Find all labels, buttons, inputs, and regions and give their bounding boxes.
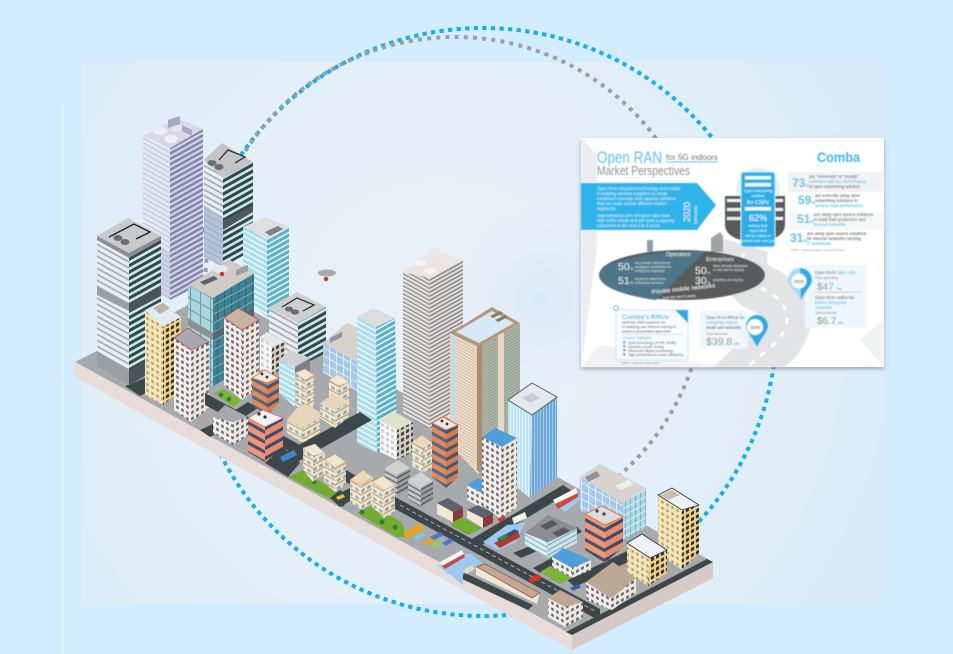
orange building (252, 370, 279, 415)
footnotes (622, 248, 845, 365)
tall yellow building (658, 488, 699, 570)
server graphic: for CSPs (747, 200, 769, 206)
2026 figure panel: Open RAN radio units (815, 270, 856, 275)
2026 figure panel: $47 (817, 282, 834, 293)
2026 figure panel: $6.7 (817, 316, 837, 327)
corner warehouse (548, 590, 583, 627)
stat list: to build their production and (814, 217, 866, 222)
stat list: 59% (798, 193, 815, 207)
stat list: confident with the performance (809, 179, 867, 184)
grass strip one (288, 470, 338, 500)
operators and enterprises oval: enterprise services (635, 281, 664, 285)
cream domed building (174, 328, 209, 422)
Comba's RRUs box: High performance power efficiency (628, 353, 683, 357)
small houses (437, 498, 493, 528)
blue arrow panel: segments. (597, 206, 616, 211)
card contents (581, 138, 884, 385)
stat list: are currently using open (815, 193, 861, 198)
map pin 2030: 2030 (750, 325, 761, 330)
twin warehouse (586, 562, 636, 610)
operators and enterprises oval: privately and deploy (713, 278, 743, 282)
2030 RRU figure panel: enterprise indoor (706, 320, 738, 325)
operators and enterprises oval: over the next 5 years (663, 294, 696, 300)
grey striped mid tower (269, 292, 326, 367)
grey block (385, 460, 410, 496)
stat list: internal networks (814, 222, 846, 227)
grass by houses (450, 517, 482, 535)
server graphic: believe that (749, 224, 767, 228)
2026 figure panel (805, 265, 867, 328)
thin vertical line (62, 105, 63, 654)
road network (200, 393, 660, 621)
blue arrow panel: forecasts (693, 205, 698, 224)
document card: Open RAN for 5G indoors (581, 138, 884, 385)
road stub with car (330, 490, 350, 507)
front cream block two (324, 454, 346, 492)
tiered building left (287, 369, 320, 443)
grass strip two with trees (357, 505, 405, 537)
Comba's RRUs box: Comba's RRUs (622, 314, 669, 321)
stat list: 51% (797, 212, 814, 226)
Comba's RRUs box: optimize RAN systems for (622, 320, 666, 324)
yellow building (145, 302, 181, 405)
operators and enterprises oval: are private networks an (635, 261, 670, 265)
card background (581, 138, 884, 367)
2030 RRU figure panel: small cell networks (706, 325, 741, 330)
2026 figure panel: networks (815, 305, 832, 310)
tiered building right (320, 374, 350, 428)
soft blue glow (450, 210, 630, 390)
operators and enterprises oval: expect to divert from (635, 277, 666, 281)
2026 figure panel: indoor enterprise (815, 300, 847, 305)
stat list (788, 172, 884, 246)
server graphic: will be critical or (745, 234, 771, 238)
server graphic: solution (751, 194, 765, 198)
server graphic: Open networking (744, 189, 772, 193)
blue glass low tower (323, 323, 358, 392)
operators and enterprises oval: 30% (695, 275, 711, 287)
cream building with blue dome (467, 478, 492, 508)
stat list: are "extremely" or "mostly" (809, 174, 859, 179)
stat list: IT workloads (807, 241, 831, 246)
cream block front left (350, 470, 373, 510)
orange tall building (432, 417, 458, 488)
grey block front (408, 472, 433, 507)
drone (318, 270, 336, 281)
white small tower (380, 412, 413, 460)
2030 RRU figure panel (700, 311, 748, 349)
map pin 2026: 2026 (794, 279, 805, 284)
Comba's RRUs box: Advanced digital processing (628, 349, 673, 353)
blue arrow panel: 2020 (682, 202, 692, 222)
cream tiered tower (412, 435, 432, 473)
grey-topped glass block (525, 515, 577, 558)
stat list: are using open source solutions (807, 231, 866, 236)
front cream block one (303, 444, 325, 482)
stat list: of open networking solution (809, 184, 861, 189)
blue glass tower (508, 383, 557, 498)
left big grey tower (97, 218, 161, 385)
map pin 2026 (788, 268, 812, 301)
inner background panel (82, 62, 884, 604)
road graphic (581, 138, 884, 385)
cyan slim tower (357, 308, 397, 453)
front harbour with ship (438, 550, 482, 585)
2030 RRU figure panel: Open RAN RRUs for (706, 315, 745, 320)
blue arrow panel: that can scale across different market (597, 201, 667, 206)
grey dotted circle (205, 37, 705, 537)
logo: Comba: Comba (817, 149, 860, 165)
low cream domed building (213, 405, 248, 445)
tall cream tower with blue dome (482, 428, 517, 518)
2026 figure panel: Mn (837, 287, 842, 291)
footnotes: MIMO = Massive Radio MIMO (622, 361, 660, 365)
Comba's RRUs box: Product highlights (623, 336, 652, 340)
stat list: are using open source solutions (814, 212, 873, 217)
vehicles on road (497, 516, 581, 591)
2026 figure panel: Total revenue (815, 311, 837, 315)
blue arrow panel: Open RAN virtualized technology and enable (597, 186, 681, 191)
blue arrow panel: Approximately 20% of indoor sites have (597, 213, 671, 218)
server graphic (725, 168, 785, 247)
operators and enterprises oval (599, 232, 765, 300)
title (597, 149, 718, 178)
stat list: achieve high performance (815, 203, 864, 208)
operators and enterprises oval: have already deployed (713, 264, 747, 268)
Comba's RRUs box: in-building use without having to (622, 325, 676, 329)
server graphic: 62% (749, 213, 767, 223)
server graphic: important over next years (738, 239, 778, 243)
2030 RRU figure panel: Mn (734, 342, 739, 346)
pink orange building (585, 506, 623, 563)
long market hall (476, 564, 540, 604)
operators and enterprises oval: Private mobile networks (652, 283, 716, 296)
title: Market Perspectives (597, 164, 690, 178)
grass by hall (540, 566, 572, 584)
isometric city (75, 116, 713, 650)
cream domed tower (224, 308, 259, 400)
tower behind with black roof frame (204, 143, 253, 267)
tall grey striped tower (403, 246, 463, 430)
stat list: 73% (792, 176, 809, 190)
title: Open RAN (597, 149, 662, 167)
server graphic: Open RAN (749, 229, 767, 233)
operators and enterprises oval: Operators (666, 252, 691, 258)
operators and enterprises oval: or will start to deploy (713, 268, 744, 272)
pink brick building (248, 410, 283, 462)
operators and enterprises oval: 50% (695, 265, 711, 277)
short yellow building (627, 534, 667, 586)
map pin 2030 (746, 315, 768, 347)
2026 figure panel: Mn (838, 321, 843, 325)
blue arrow panel: expansion in the next 2 to 3 years. (597, 223, 661, 228)
blue arrow panel (581, 183, 716, 230)
2030 RRU figure panel: Total revenue (706, 332, 728, 336)
upper harbour with ship (553, 488, 580, 512)
stat list: 31% (790, 231, 807, 245)
blue arrow panel: combined coverage and capacity solutions (597, 196, 676, 201)
operators and enterprises oval: 51% (618, 275, 634, 287)
Comba's RRUs box: adopt a proprietary approach (622, 330, 671, 334)
tall lavender tower (143, 116, 203, 300)
small white building (260, 332, 285, 377)
operators and enterprises oval: 50% (618, 261, 634, 273)
grass and parking with truck and cars (400, 520, 455, 556)
footnotes: CSPs = Communications Service Providers (791, 248, 845, 252)
cyan tower (243, 217, 289, 317)
blue dotted circle (189, 28, 777, 616)
operators and enterprises oval: Enterprises (706, 257, 734, 263)
title: for 5G indoors (666, 152, 718, 162)
water harbour with ship (483, 512, 527, 550)
stat list: networking solutions to (815, 198, 858, 203)
grass patch with trees (213, 389, 242, 407)
Comba's RRUs box (614, 306, 688, 360)
operators and enterprises oval: enterprise business (635, 269, 665, 273)
blue domed hall (552, 548, 591, 578)
peach tower with blue roof (450, 307, 520, 475)
stat list: for internal networks carrying (807, 236, 861, 241)
2030 RRU figure panel: $39.8 (706, 336, 732, 348)
cyan small block (279, 350, 310, 407)
2026 figure panel: Open RAN radios for (815, 295, 854, 300)
platform (75, 291, 713, 650)
Comba's RRUs box: Dynamic power tuning (628, 345, 664, 349)
blue arrow panel: in-building wireless suppliers to create (597, 191, 668, 196)
operators and enterprises oval: untapped contribution to (635, 265, 671, 269)
road block with cars (265, 447, 300, 477)
large glass office (580, 464, 646, 540)
blue arrow panel: high traffic needs and will need a capacity (597, 218, 675, 223)
glass office block (188, 260, 254, 387)
Comba's RRUs box: Split technology (4T4R, 8T8R) (628, 341, 676, 345)
cream block front (372, 476, 395, 518)
2026 figure panel: Total spending (815, 276, 838, 280)
